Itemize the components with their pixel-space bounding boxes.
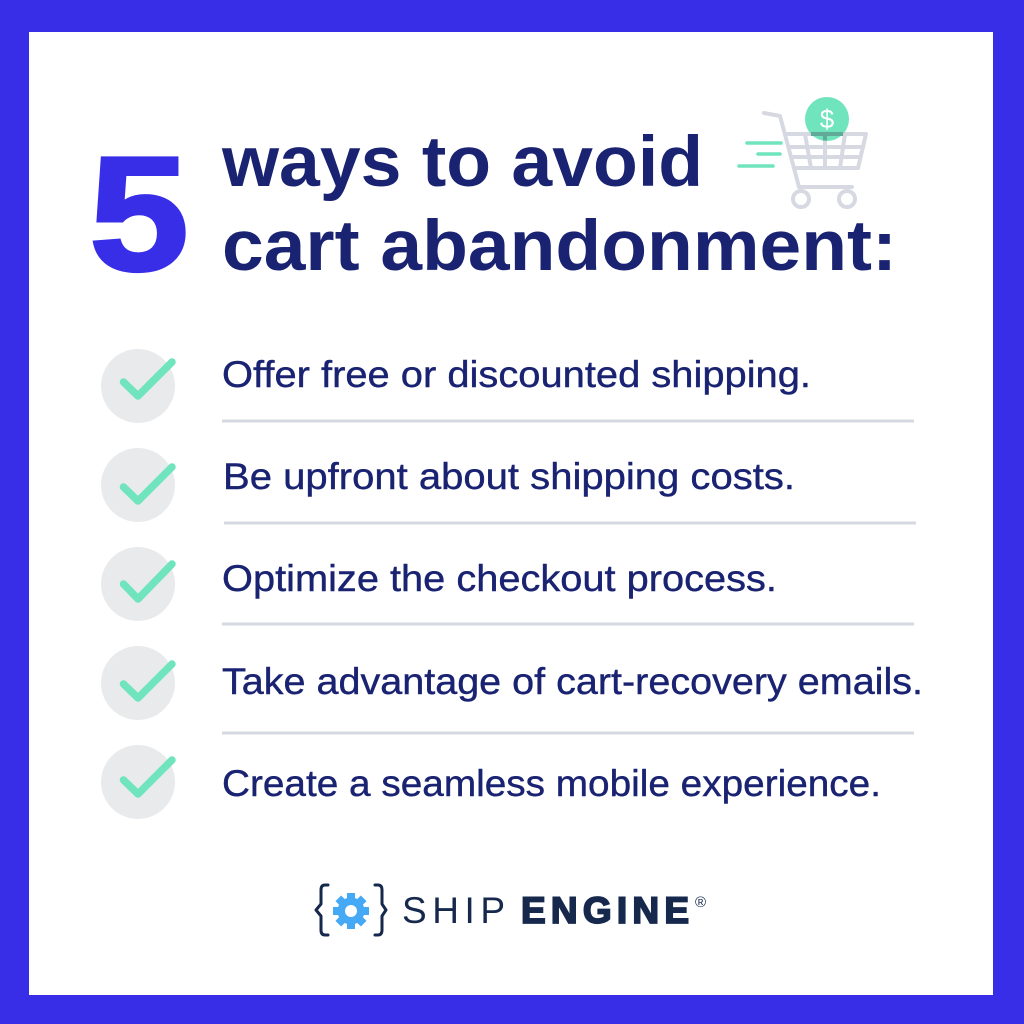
title: ways to avoid: [221, 123, 703, 202]
ShipEngine logo: SHIP: [402, 890, 505, 931]
icon: shopping cart with dollar coin: [739, 97, 866, 207]
list text: [222, 354, 923, 804]
check icon 3: [101, 547, 175, 621]
big number 5: 5: [89, 122, 189, 305]
list text: Take advantage of cart-recovery emails.: [222, 661, 923, 702]
list text: Optimize the checkout process.: [222, 558, 777, 599]
ShipEngine logo: [316, 885, 706, 935]
check icon 2: [101, 448, 175, 522]
list text: Be upfront about shipping costs.: [223, 456, 795, 497]
list text: Offer free or discounted shipping.: [222, 354, 811, 395]
title: cart abandonment:: [222, 207, 897, 286]
list text: Create a seamless mobile experience.: [222, 763, 881, 804]
icon: shopping cart with dollar coin: $: [820, 104, 835, 134]
check icon 5: [101, 745, 175, 819]
check icon 1: [101, 349, 175, 423]
checklist rows: [101, 349, 175, 819]
check icon 4: [101, 646, 175, 720]
ShipEngine logo: ENGINE: [521, 890, 689, 931]
ShipEngine logo: ®: [695, 894, 706, 911]
title: [221, 123, 897, 286]
